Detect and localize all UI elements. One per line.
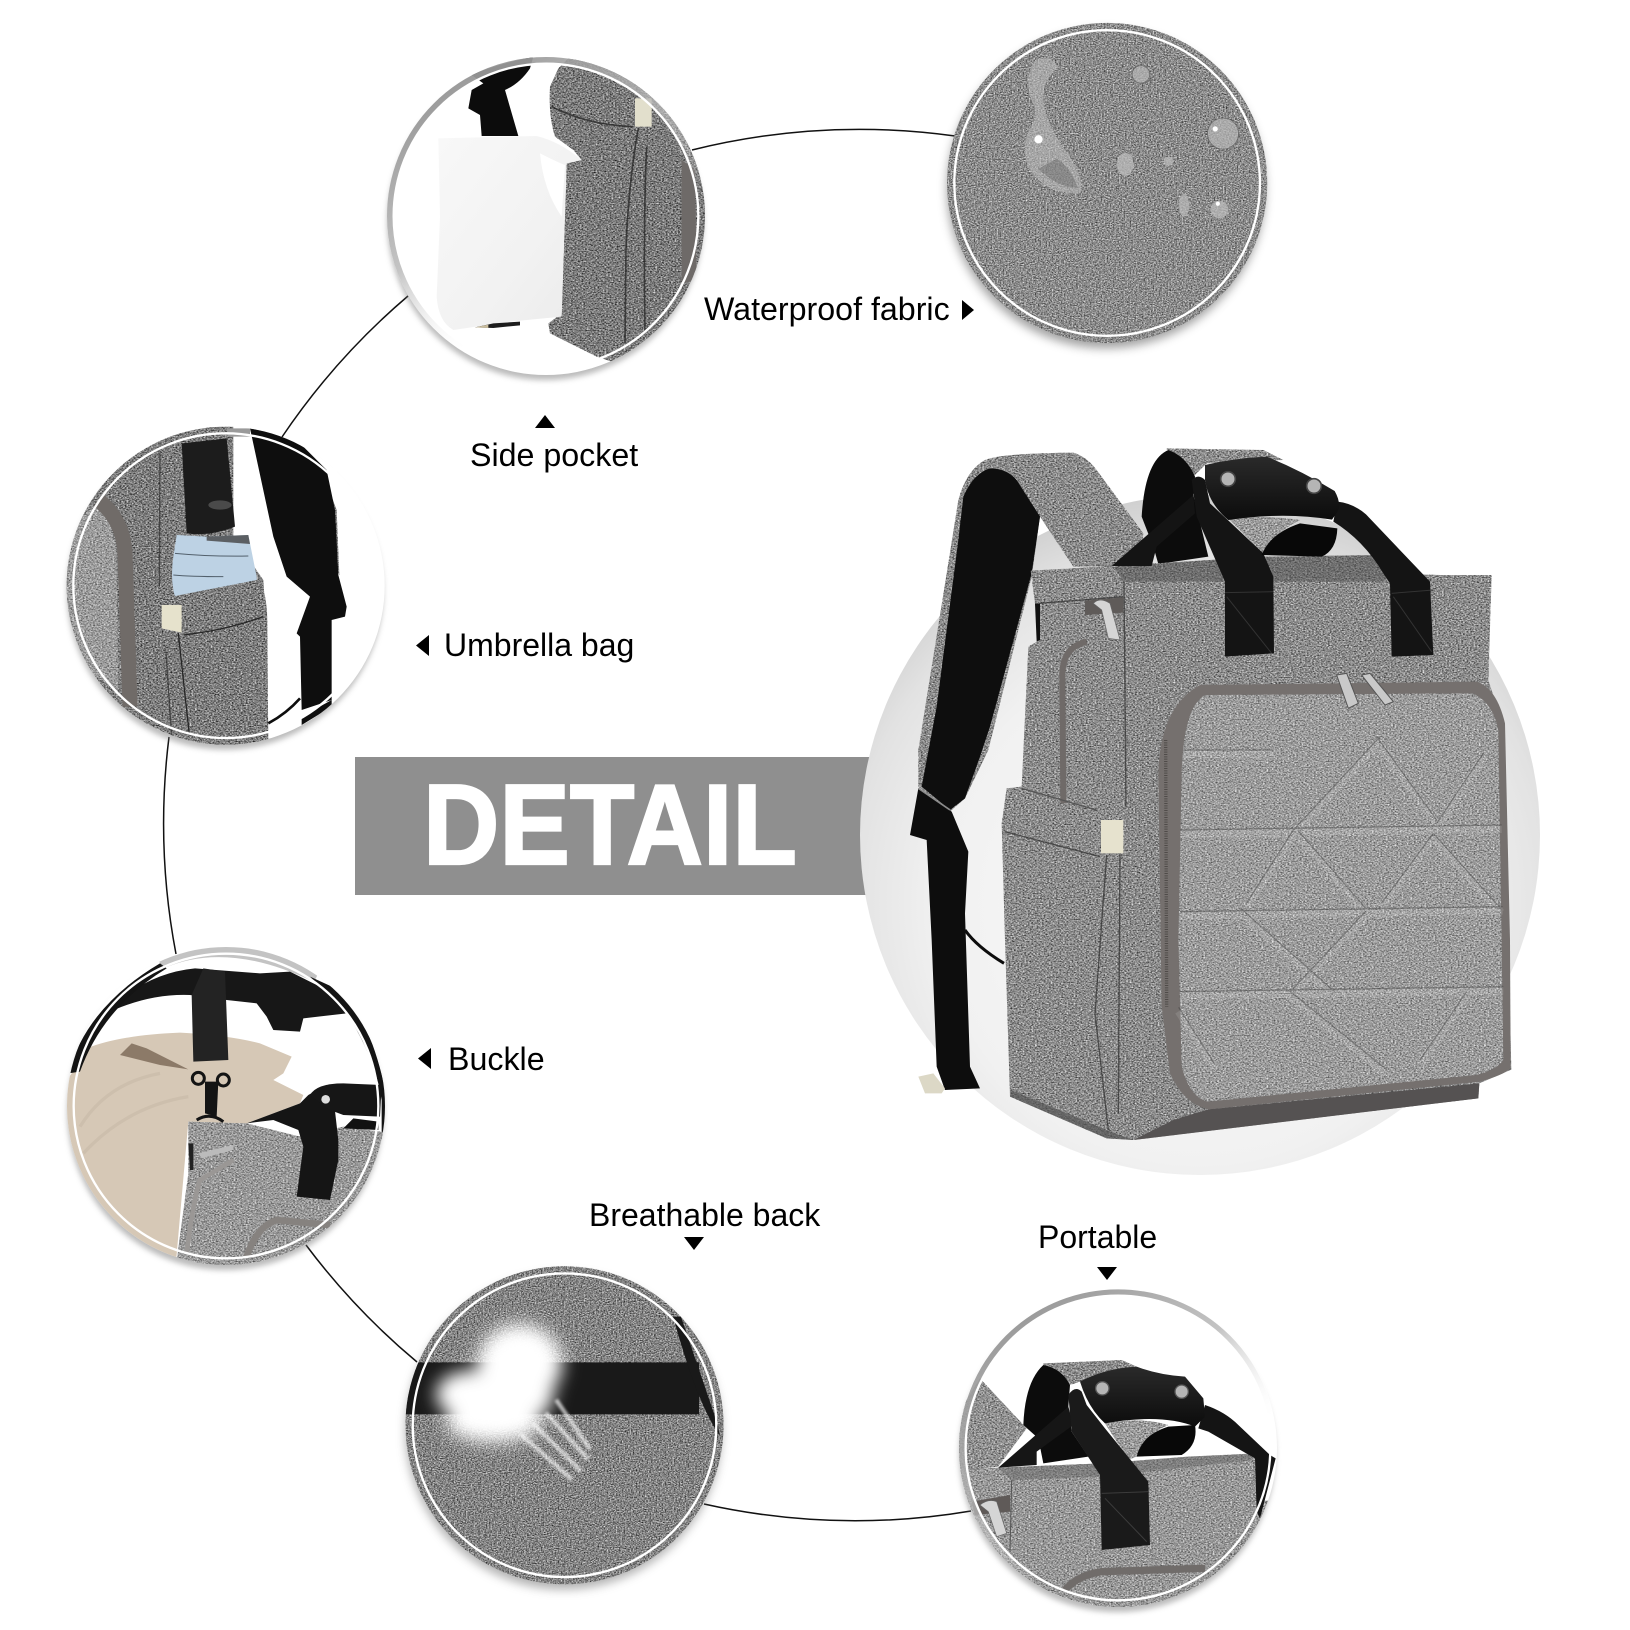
leather patch with rivets <box>1080 1367 1205 1427</box>
side zipper <box>1062 642 1087 803</box>
hanging hook strap <box>192 968 228 1062</box>
connecting arcs <box>164 129 971 1521</box>
lower strap <box>910 788 980 1090</box>
photo circle: buckle <box>60 940 393 1273</box>
white plastic bag <box>437 136 582 330</box>
back panel sliver <box>1035 603 1040 642</box>
bottom shadow strip <box>1133 1083 1479 1140</box>
right handle <box>1333 502 1433 657</box>
leather grip with rivets <box>1205 457 1339 520</box>
rear top panel <box>1167 448 1283 477</box>
grey fabric body <box>955 1378 1027 1472</box>
pocket front <box>163 580 268 753</box>
label: Breathable back: Breathable back <box>589 1197 821 1233</box>
umbrella canopy <box>172 535 257 597</box>
side zipper and puller <box>972 1495 1010 1515</box>
pocket top edge <box>1022 788 1097 810</box>
beige tab <box>162 605 182 633</box>
label: Breathable back <box>589 1197 821 1250</box>
quilting seam lines <box>1179 737 1503 1070</box>
left handle <box>1192 477 1274 657</box>
beige tab <box>635 98 652 127</box>
bag body <box>1002 555 1511 1140</box>
left shoulder strap <box>918 453 1143 812</box>
tote handle and leather <box>247 1087 338 1200</box>
label: Portable: Portable <box>1038 1219 1157 1255</box>
label: Side pocket <box>470 415 638 473</box>
black band <box>403 1362 699 1414</box>
label: Umbrella bag: Umbrella bag <box>444 627 634 663</box>
grey bag body <box>177 1122 383 1265</box>
quilting seam highlights <box>1179 741 1503 1074</box>
white air cloud <box>436 1324 562 1442</box>
water drops <box>1025 57 1239 218</box>
shoulder strap <box>332 499 340 575</box>
beige bag <box>60 1033 303 1273</box>
photo circle: waterproof fabric <box>945 21 1270 348</box>
grey bag side <box>60 420 268 753</box>
label: Buckle: Buckle <box>448 1041 545 1077</box>
photo circle: side pocket <box>380 50 713 383</box>
umbrella handle <box>182 438 235 534</box>
top fold shadow <box>1113 555 1393 582</box>
front zipper pullers <box>1337 673 1393 708</box>
backdrop circle behind backpack <box>860 495 1540 1175</box>
air streaks <box>520 1400 590 1479</box>
photo circle: umbrella bag <box>60 420 393 753</box>
grey bag side <box>548 57 713 367</box>
banner background <box>355 757 885 895</box>
photo circle: portable <box>955 1285 1288 1618</box>
label: Portable <box>1038 1219 1157 1280</box>
label: Waterproof fabric: Waterproof fabric <box>704 291 950 327</box>
beige side tab <box>1101 820 1123 853</box>
label: Side pocket: Side pocket <box>470 437 638 473</box>
quilted front pocket <box>1178 693 1503 1102</box>
stroller handlebar <box>103 968 347 1032</box>
photo circle: breathable back <box>403 1262 728 1590</box>
black shoulder strap <box>468 57 533 136</box>
banner title: DETAIL: DETAIL <box>423 762 797 889</box>
handle stitching patches <box>1225 590 1433 653</box>
handle straps <box>1023 1365 1088 1463</box>
strap end tab <box>918 1073 945 1093</box>
front pocket zipper frame <box>1158 682 1511 1109</box>
main backpack <box>910 448 1511 1140</box>
top zipper with puller <box>1085 597 1123 615</box>
structural seams <box>1005 582 1126 1130</box>
